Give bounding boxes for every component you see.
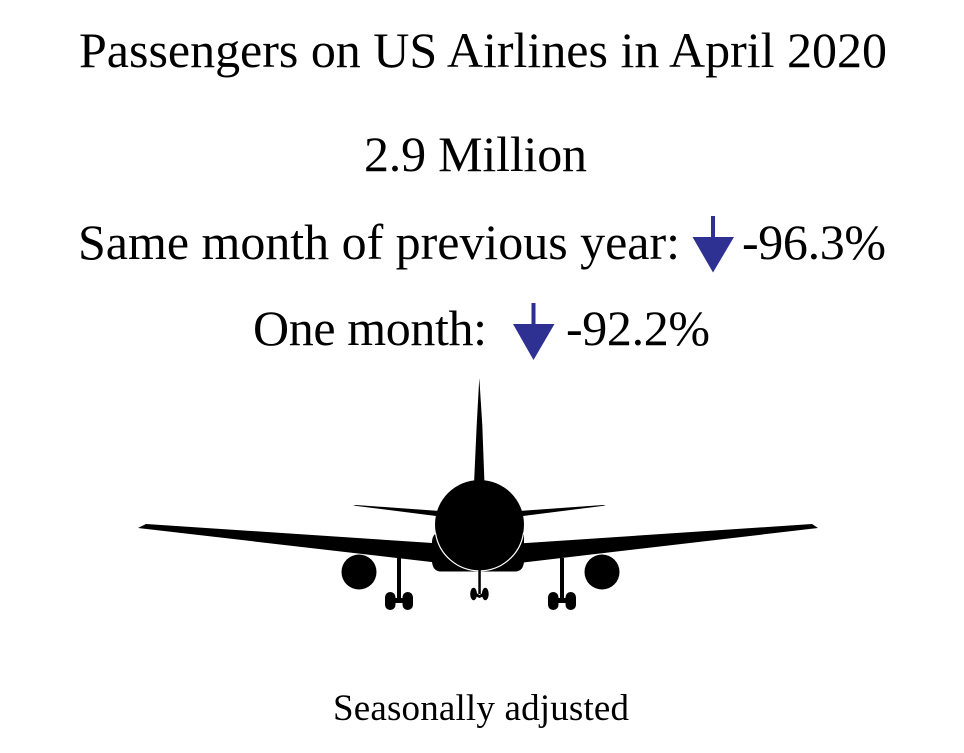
value: -92.2%: -92.2% (566, 300, 710, 356)
icon: down arrow (692, 216, 734, 272)
icon: airplane front view (138, 378, 818, 610)
tail fin (474, 378, 484, 484)
engines (342, 554, 376, 590)
footnote: Seasonally adjusted (333, 688, 630, 729)
fuselage (435, 480, 524, 569)
horizontal stabilizers (353, 505, 440, 516)
title: Passengers on US Airlines in April 2020 (79, 22, 887, 78)
year-over-year change (78, 214, 886, 272)
month-over-month change (253, 300, 710, 360)
wings (138, 524, 440, 563)
left main gear (385, 558, 413, 610)
belly (432, 534, 524, 572)
value: -96.3%: -96.3% (742, 214, 886, 270)
right main gear (548, 558, 576, 610)
label: one month: One month: (253, 300, 487, 356)
icon: down arrow (513, 303, 554, 360)
label: same month of previous year: Same month of previous year: (78, 214, 680, 270)
headline value: 2.9 Million (364, 126, 587, 182)
nose gear (470, 570, 489, 600)
